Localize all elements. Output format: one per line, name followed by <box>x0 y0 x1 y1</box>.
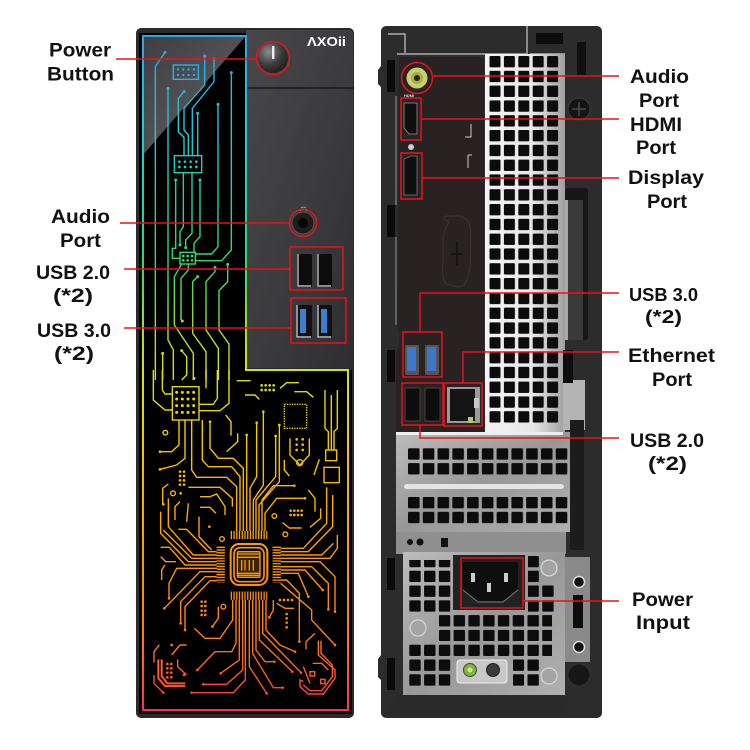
label: Ethernet Port: Port <box>652 370 693 391</box>
vent grille <box>485 54 565 432</box>
knockout plate <box>443 216 471 287</box>
label: HDMI Port: HDMI <box>630 115 682 136</box>
power socket <box>453 555 525 610</box>
IO plate <box>396 57 484 432</box>
label: Power Input: Power <box>632 590 694 611</box>
audio jack <box>292 212 314 234</box>
label: USB 2.0 front <box>36 263 110 307</box>
glass reflection <box>143 37 245 155</box>
label: Audio Port rear <box>630 67 689 112</box>
front USB 3.0 ports <box>296 305 332 338</box>
label: USB 2.0 rear <box>630 431 704 475</box>
label: Display Port: Display <box>628 168 704 189</box>
left seam line <box>395 96 397 325</box>
label: USB 2.0 rear: USB 2.0 <box>630 431 704 452</box>
label: USB 2.0 front: USB 2.0 <box>36 263 110 284</box>
left edge bumps <box>378 66 381 680</box>
label: USB 3.0 front: (*2) <box>54 344 94 365</box>
label: Power Button <box>47 40 114 86</box>
top plate details <box>388 26 565 54</box>
psu screws <box>410 560 557 684</box>
label: Audio Port rear: Port <box>639 91 680 112</box>
rear USB 2.0 ports <box>405 388 440 421</box>
headphone icon <box>300 207 306 211</box>
label: Audio Port rear: Audio <box>630 67 689 88</box>
side slots <box>387 60 395 690</box>
circuit traces lower with CPU <box>153 370 339 694</box>
Ethernet port <box>447 387 480 423</box>
front view of PC tower <box>136 28 354 718</box>
top slots and screw <box>536 33 590 120</box>
label: HDMI Port: Port <box>636 138 677 159</box>
HDMI port <box>404 103 417 134</box>
expansion bracket <box>396 432 570 538</box>
label: Display Port <box>628 168 704 213</box>
label: Audio Port front: Port <box>60 231 102 252</box>
label: USB 2.0 rear: (*2) <box>648 454 687 475</box>
power supply plate <box>403 552 565 695</box>
label: Ethernet Port: Ethernet <box>628 346 716 367</box>
HDMI label: HDMI <box>404 93 414 98</box>
label: Power Input: Input <box>636 613 691 634</box>
mid strip <box>396 532 566 554</box>
label: Audio Port front <box>51 207 110 252</box>
rear chassis body <box>381 26 602 718</box>
audio out jack <box>406 68 428 88</box>
black glass panel <box>139 33 352 714</box>
red callouts <box>116 42 619 608</box>
label: Power Button: Power <box>49 40 112 62</box>
label: USB 3.0 front <box>37 321 111 365</box>
label: Power Button: Button <box>47 64 114 86</box>
upper metal panel <box>246 30 353 368</box>
label: Display Port: Port <box>647 192 688 213</box>
rear USB 3.0 ports <box>405 345 439 375</box>
label: Audio Port front: Audio <box>51 207 110 228</box>
lower chassis band <box>386 695 570 715</box>
handle recess <box>565 188 588 340</box>
label: USB 3.0 rear <box>629 285 698 327</box>
bracket side rail <box>570 420 584 550</box>
neon outline <box>143 36 348 710</box>
label: USB 3.0 rear: (*2) <box>645 307 682 327</box>
label: Power Input <box>632 590 694 634</box>
LED status plate <box>457 660 507 683</box>
right silver block <box>563 350 585 430</box>
DisplayPort port <box>404 156 417 195</box>
label: USB 3.0 front: USB 3.0 <box>37 321 111 342</box>
label: Ethernet Port <box>628 346 716 391</box>
front chassis body <box>136 28 354 718</box>
front USB 2.0 ports <box>297 254 332 287</box>
DP icon <box>408 144 414 150</box>
power button <box>258 43 288 73</box>
panel divider <box>247 87 353 89</box>
label: USB 2.0 front: (*2) <box>53 286 93 307</box>
logo: ΛXOii <box>307 34 346 49</box>
label: HDMI Port <box>630 115 682 159</box>
label: USB 3.0 rear: USB 3.0 <box>629 285 698 305</box>
right side strip <box>565 557 590 686</box>
circuit traces upper <box>155 52 231 380</box>
small plate marks <box>465 124 472 168</box>
